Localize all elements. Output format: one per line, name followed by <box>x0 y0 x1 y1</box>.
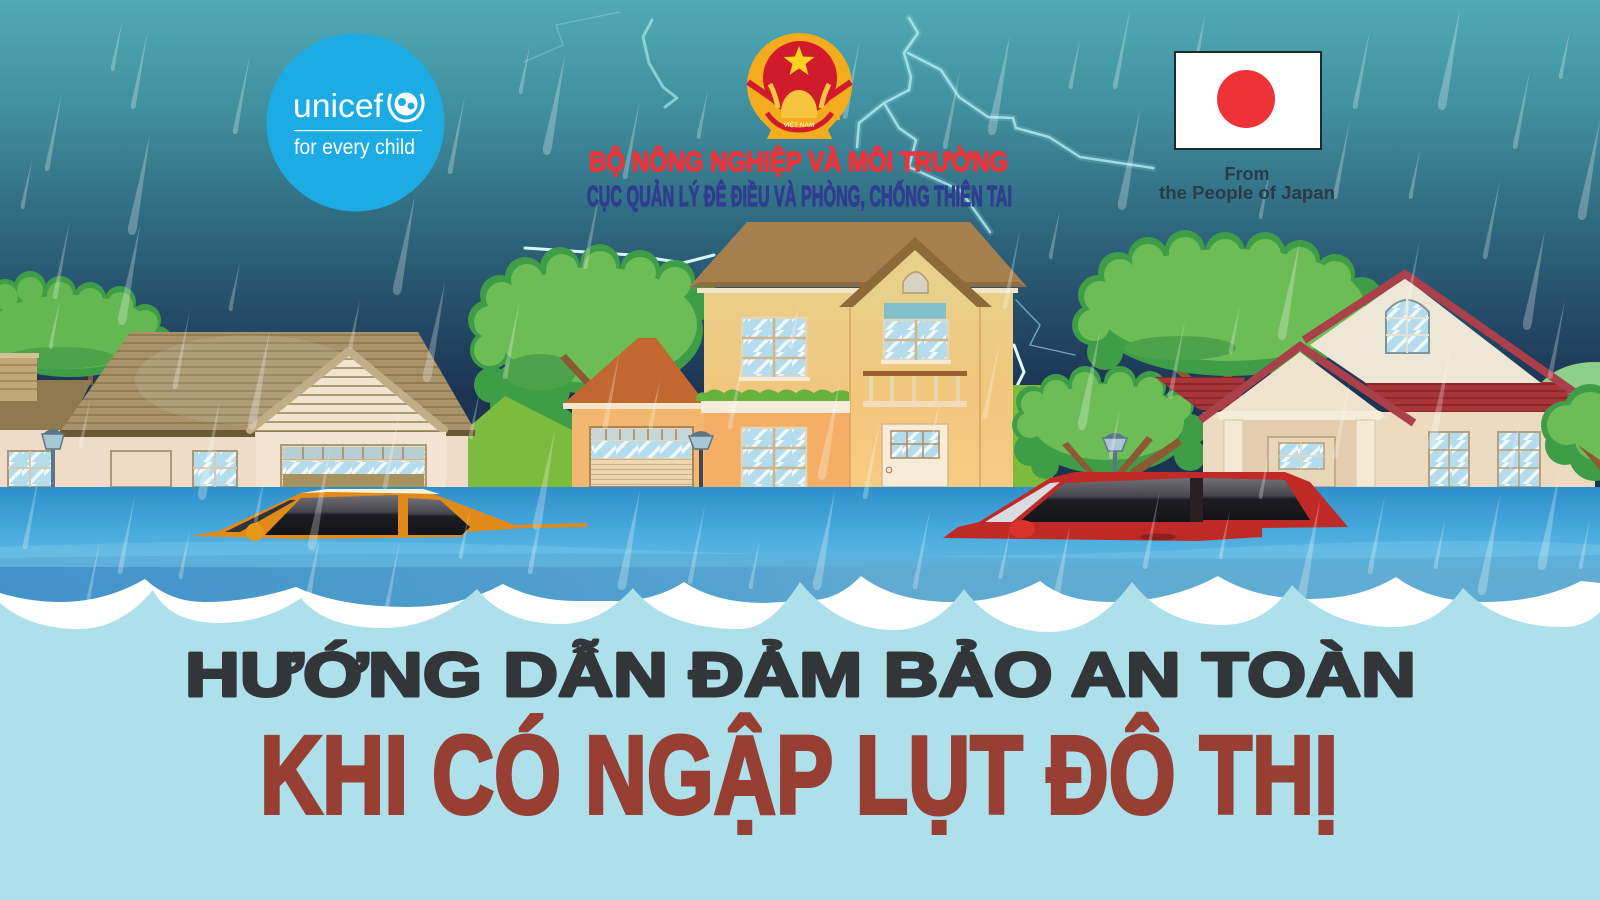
tree: centre behind main house <box>468 244 720 440</box>
main title line 1: HƯỚNG DẪN ĐẢM BẢO AN TOÀN <box>185 641 1416 710</box>
house: far-left with brick chimney <box>0 353 92 432</box>
tree: small front right <box>1012 366 1206 479</box>
logo: UNICEF <box>266 34 444 212</box>
main title line 2: KHI CÓ NGẬP LỤT ĐÔ THỊ <box>260 714 1338 837</box>
main roof <box>689 222 1027 287</box>
roof <box>60 332 476 432</box>
house: left beige <box>0 332 476 487</box>
house: main two-storey <box>689 222 1027 487</box>
garage <box>281 445 426 487</box>
upper gable <box>1310 278 1541 383</box>
upper left window <box>739 318 810 381</box>
front door <box>882 424 948 487</box>
hill: far right <box>1535 362 1600 438</box>
stormy sky background <box>0 0 1600 490</box>
logo: Vietnam national emblem <box>747 33 852 139</box>
logo: Japan flag <box>1175 52 1321 149</box>
wordmark: unicef <box>293 87 384 124</box>
attic window <box>1386 298 1429 353</box>
right windows <box>1429 432 1540 487</box>
lightning bolts <box>524 12 1153 392</box>
columns <box>1224 420 1375 487</box>
tree: far left <box>0 271 172 385</box>
garage door <box>590 427 693 487</box>
tagline: for every child <box>294 136 415 159</box>
car: orange submerged <box>191 489 587 541</box>
logo: Vietnam national emblem: VIỆT NAM <box>783 120 815 129</box>
left window <box>8 451 52 487</box>
white wave crest <box>0 576 1600 660</box>
right wing gable <box>839 237 992 307</box>
rain <box>21 10 1600 635</box>
lamp post: centre <box>689 431 713 487</box>
house: orange small <box>563 338 707 487</box>
lamp post: right <box>1103 433 1127 480</box>
Japan caption: the People of Japan <box>1159 183 1335 203</box>
roof <box>563 338 706 404</box>
right window <box>193 451 237 487</box>
house: right red roof <box>1155 274 1595 487</box>
planter with hedge <box>695 390 850 413</box>
globe emblem <box>389 93 423 121</box>
agency name: ministry: BỘ NÔNG NGHIỆP VÀ MÔI TRƯỜNG <box>589 145 1008 177</box>
upper right window <box>881 303 951 364</box>
door <box>111 451 171 487</box>
gable <box>254 350 444 431</box>
floodwater <box>0 487 1600 612</box>
porch gable <box>1212 352 1388 418</box>
balcony <box>863 371 967 407</box>
light blue foreground wave panel <box>0 582 1600 900</box>
Japan caption: From <box>1224 164 1270 184</box>
tree: big right <box>1072 230 1382 380</box>
green lawn behind houses <box>468 396 572 487</box>
tree: far right <box>1541 384 1600 481</box>
Japan caption <box>1159 164 1335 203</box>
agency name: department: CỤC QUẢN LÝ ĐÊ ĐIỀU VÀ PHÒNG, CHỐNG THIÊN TAI <box>587 179 1012 213</box>
attic vent <box>903 272 928 293</box>
porch door <box>1268 437 1335 487</box>
lower left window <box>742 428 806 487</box>
car: red submerged <box>943 472 1348 541</box>
red tile roofs <box>1155 377 1245 410</box>
lamp post: left <box>42 429 64 487</box>
